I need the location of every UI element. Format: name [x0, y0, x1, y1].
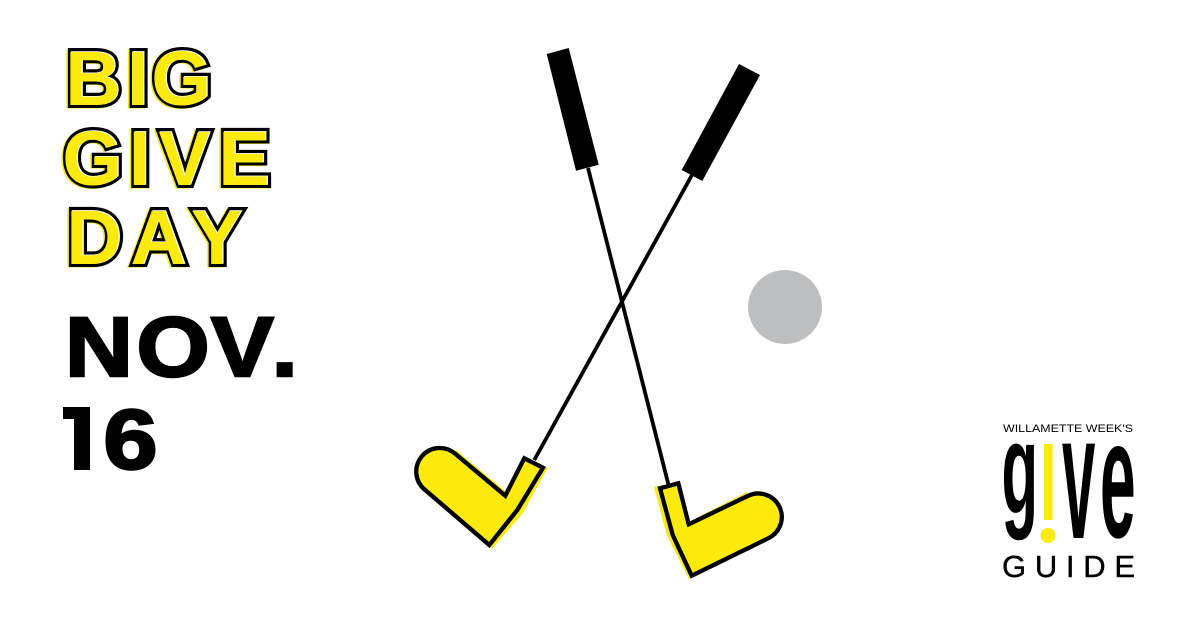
heading line: GIVE: GIVE	[63, 116, 271, 202]
logo exclamation mark	[1040, 444, 1056, 543]
club shaft	[588, 168, 668, 484]
heading line: BIG: BIG	[64, 36, 210, 122]
date: NOV. 16	[63, 316, 293, 471]
heading line: DAY: DAY	[67, 194, 243, 280]
icon: right-leaning golf club	[416, 64, 760, 549]
logo letter g: g	[1002, 398, 1038, 541]
logo letter v: v	[1062, 377, 1095, 577]
club head	[654, 483, 782, 579]
date line: 16: 1	[56, 392, 108, 486]
heading line: DAY: DAY	[66, 195, 242, 281]
heading line: GIVE: GIVE	[63, 116, 271, 202]
heading line: BIG: BIG	[66, 36, 212, 122]
heading line: BIG: BIG	[66, 36, 212, 122]
club grip	[547, 48, 599, 171]
club grip	[682, 64, 760, 181]
heading line: DAY: DAY	[67, 194, 243, 280]
heading line: BIG: BIG	[65, 36, 211, 122]
title: Big Give Day	[61, 36, 271, 282]
logo kicker: WILLAMETTE WEEK'S	[1003, 423, 1133, 435]
heading line: DAY: DAY	[65, 196, 241, 282]
logo letter e: e	[1100, 385, 1136, 574]
club head	[416, 448, 548, 549]
icon: left-leaning golf club	[547, 48, 782, 579]
heading line: GIVE: GIVE	[62, 116, 270, 202]
club shaft	[534, 175, 692, 460]
date line: 16	[63, 407, 156, 471]
date line: 16: 6	[103, 394, 158, 487]
icon: golf ball	[748, 270, 822, 344]
logo: Willamette Week's Give Guide	[1002, 377, 1136, 584]
logo word GUIDE: GUIDE	[1002, 549, 1135, 584]
date line: NOV.: NOV.	[65, 300, 298, 394]
heading line: GIVE: GIVE	[61, 116, 269, 202]
